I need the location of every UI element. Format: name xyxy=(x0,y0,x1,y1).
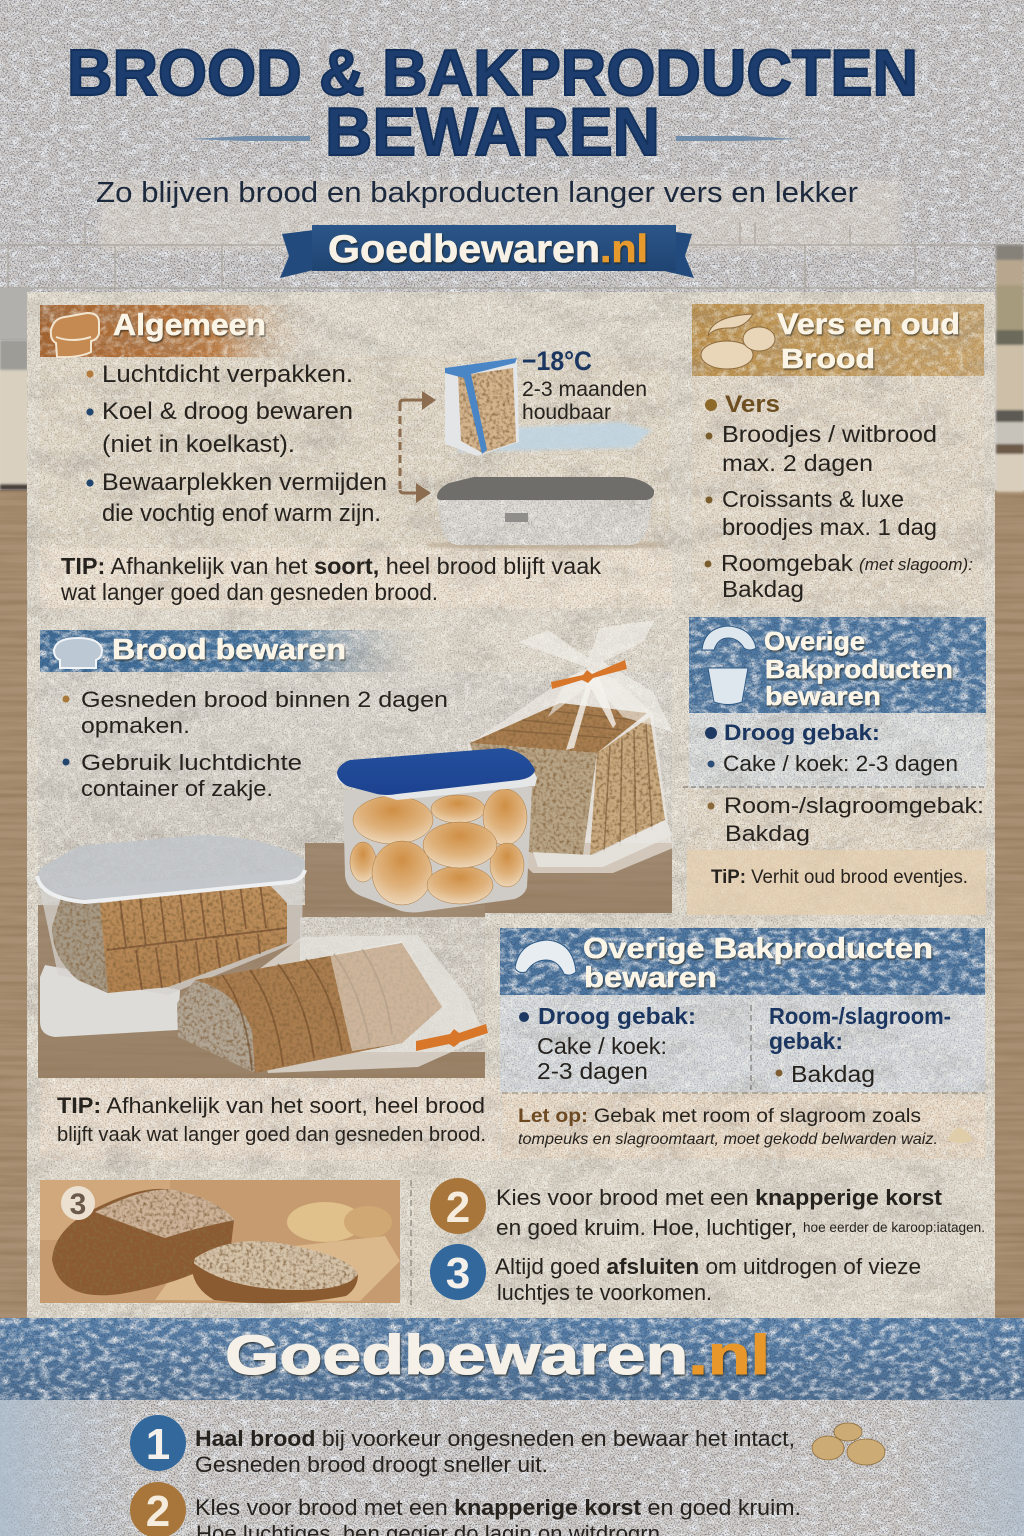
list: droog gebak: Droog gebak: xyxy=(724,720,880,745)
heading: overige bakproducten bewaren: bewaren xyxy=(584,962,717,994)
icon: bread rolls xyxy=(701,314,775,369)
list: vers: Roomgebak xyxy=(721,550,854,576)
list: vers: Vers xyxy=(725,391,780,418)
tip: algemeen xyxy=(60,553,602,605)
list: algemeen tips: Luchtdicht verpakken. xyxy=(102,361,353,388)
step 3 xyxy=(430,1244,921,1305)
column: droog gebak: 2-3 dagen xyxy=(537,1058,648,1084)
temperature note xyxy=(522,346,647,424)
tip: oud brood: TiP: Verhit oud brood eventjes. xyxy=(711,867,968,888)
bottom tips xyxy=(130,1415,885,1536)
tip 1 xyxy=(130,1415,795,1477)
heading: vers en oud brood: Vers en oud xyxy=(777,308,960,341)
heading: algemeen: Algemeen xyxy=(113,307,266,342)
heading: brood bewaren: Brood bewaren xyxy=(112,634,346,666)
panel: algemeen xyxy=(40,305,672,609)
list: vers xyxy=(704,391,973,602)
title block xyxy=(67,36,918,278)
panel: overige bakproducten (midden) xyxy=(500,928,985,1159)
list: algemeen tips: (niet in koelkast). xyxy=(102,431,295,458)
heading: overige bakproducten: Bakproducten xyxy=(765,654,953,684)
heading: overige bakproducten bewaren: Overige Bakproducten xyxy=(583,933,933,965)
list: brood bewaren: opmaken. xyxy=(81,713,190,738)
column: room- en slagroomgebak xyxy=(769,1003,951,1087)
step 2: 2 xyxy=(446,1183,470,1232)
list: droog gebak xyxy=(705,720,958,776)
badge: 3: 3 xyxy=(70,1188,86,1221)
tip 2: 2 xyxy=(146,1487,170,1536)
list: brood bewaren: Gebruik luchtdichte xyxy=(81,750,302,775)
list: vers: broodjes max. 1 dag xyxy=(722,514,937,540)
heading: overige bakproducten: bewaren xyxy=(765,681,881,711)
photo: rectangular container with sliced bread xyxy=(37,835,305,1037)
illustration: bread box xyxy=(425,477,665,550)
bottle on the right xyxy=(996,245,1024,492)
callout: let op: Let op: Gebak met room of slagroom zoals xyxy=(518,1106,921,1127)
step 2: en goed kruim. Hoe, luchtiger, xyxy=(496,1215,797,1240)
list: algemeen tips: Koel & droog bewaren xyxy=(102,398,353,425)
list: brood bewaren: Gesneden brood binnen 2 dagen xyxy=(81,687,448,712)
icon: loaf xyxy=(54,638,102,668)
icon: small rolls xyxy=(812,1423,885,1465)
list: vers: max. 2 dagen xyxy=(722,450,873,476)
banner: goedbewaren.nl: Goedbewaren .nl xyxy=(328,228,648,271)
tip 1: Gesneden brood droogt sneller uit. xyxy=(195,1452,548,1477)
photo: container with rolls and blue lid xyxy=(335,748,537,912)
step 3: 3 xyxy=(446,1249,470,1298)
heading: overige bakproducten: Overige xyxy=(764,626,865,656)
heading: overige bakproducten xyxy=(764,626,953,711)
heading: vers en oud brood xyxy=(777,308,960,374)
subtitle: Zo blijven brood en bakproducten langer vers en lekker xyxy=(96,177,858,209)
heading band: algemeen xyxy=(40,305,330,357)
step 3: luchtjes te voorkomen. xyxy=(497,1280,712,1305)
band: goedbewaren.nl footer xyxy=(0,1318,1024,1400)
step 2 xyxy=(430,1178,985,1240)
title xyxy=(67,36,918,170)
column: droog gebak: Droog gebak: xyxy=(538,1003,696,1029)
tip: brood bewaren: TIP: Afhankelijk van het soort, heel brood xyxy=(57,1093,485,1118)
temperature note: houdbaar xyxy=(522,401,611,424)
jar on the left xyxy=(0,340,28,490)
heading: overige bakproducten bewaren xyxy=(583,933,933,994)
panel: overige bakproducten (rechts) xyxy=(683,617,986,915)
banner: goedbewaren.nl xyxy=(280,225,694,278)
step 2: hoe eerder de karoop:iatagen. xyxy=(803,1219,985,1235)
band: goedbewaren.nl footer: Goedbewaren .nl xyxy=(225,1323,770,1386)
heading band: brood bewaren xyxy=(40,630,440,672)
temperature note: −18°C xyxy=(522,346,592,376)
illustration: freezer bag with bread xyxy=(445,358,652,456)
list: brood bewaren xyxy=(62,687,448,801)
column: droog gebak: Cake / koek: xyxy=(537,1033,667,1059)
icon: bread loaf xyxy=(51,313,99,357)
badge: 3 xyxy=(61,1186,95,1221)
photo: bread in bag with orange tie xyxy=(468,620,673,873)
heading: vers en oud brood: Brood xyxy=(781,343,875,374)
column: room- en slagroomgebak: Bakdag xyxy=(791,1061,875,1087)
tip: algemeen: wat langer goed dan gesneden brood. xyxy=(60,579,438,605)
callout: let op: tompeuks en slagroomtaart, moet gekodd belwarden waiz. xyxy=(518,1131,938,1148)
tip 2 xyxy=(130,1482,801,1536)
main paper panel xyxy=(27,292,995,1318)
tip 1: Haal brood bij voorkeur ongesneden en bewaar het intact, xyxy=(195,1426,795,1451)
tip: brood bewaren: blijft vaak wat langer goed dan gesneden brood. xyxy=(57,1124,486,1146)
title: BROOD & BAKPRODUCTEN xyxy=(67,36,918,109)
list: vers: Bakdag xyxy=(722,576,804,602)
list: room- en slagroomgebak xyxy=(683,787,986,846)
list: vers: Croissants & luxe xyxy=(722,486,904,512)
step 3: Altijd goed afsluiten om uitdrogen of vieze xyxy=(495,1254,921,1279)
step 2: Kies voor brood met een knapperige korst xyxy=(496,1185,943,1210)
list: vers: Broodjes / witbrood xyxy=(722,421,937,447)
list: droog gebak: Cake / koek: 2-3 dagen xyxy=(723,751,958,776)
list: algemeen tips: die vochtig enof warm zijn. xyxy=(102,500,381,527)
heading band: overige xyxy=(689,617,986,713)
list: brood bewaren: container of zakje. xyxy=(81,776,273,801)
column: room- en slagroomgebak: Room-/slagroom- xyxy=(769,1003,951,1029)
panel: brood bewaren xyxy=(37,620,673,1078)
photo: half loaf in plastic bag xyxy=(177,935,488,1073)
column: room- en slagroomgebak: gebak: xyxy=(769,1028,843,1054)
heading band: overige midden xyxy=(500,928,985,995)
tip 2: Kles voor brood met een knapperige korst en goed kruim. xyxy=(195,1495,801,1520)
panel: vers en oud brood xyxy=(692,304,984,609)
tip: brood bewaren xyxy=(40,1078,500,1160)
callout: let op xyxy=(502,1093,985,1159)
icon: croissant xyxy=(515,940,576,975)
temperature note: 2-3 maanden xyxy=(522,378,647,401)
icon: croissant and bowl xyxy=(702,626,756,704)
list: vers: (met slagoom): xyxy=(859,555,973,574)
title: BEWAREN xyxy=(325,94,660,170)
column: droog gebak xyxy=(519,1003,696,1084)
list: algemeen tips xyxy=(86,361,387,527)
heading band: vers en oud xyxy=(692,304,984,376)
list: algemeen tips: Bewaarplekken vermijden xyxy=(102,469,387,496)
list: room- en slagroomgebak: Room-/slagroomgebak: xyxy=(724,793,984,818)
photo: sliced loaf on baking paper xyxy=(40,1180,400,1303)
arrows: storage options xyxy=(400,391,436,503)
texture: side tint xyxy=(0,1400,1024,1536)
list: room- en slagroomgebak: Bakdag xyxy=(725,821,810,846)
panel: tips met foto xyxy=(40,1178,985,1305)
tip: algemeen: TIP: Afhankelijk van het soort, heel brood blijft vaak xyxy=(61,553,602,579)
tip 1: 1 xyxy=(146,1420,170,1469)
